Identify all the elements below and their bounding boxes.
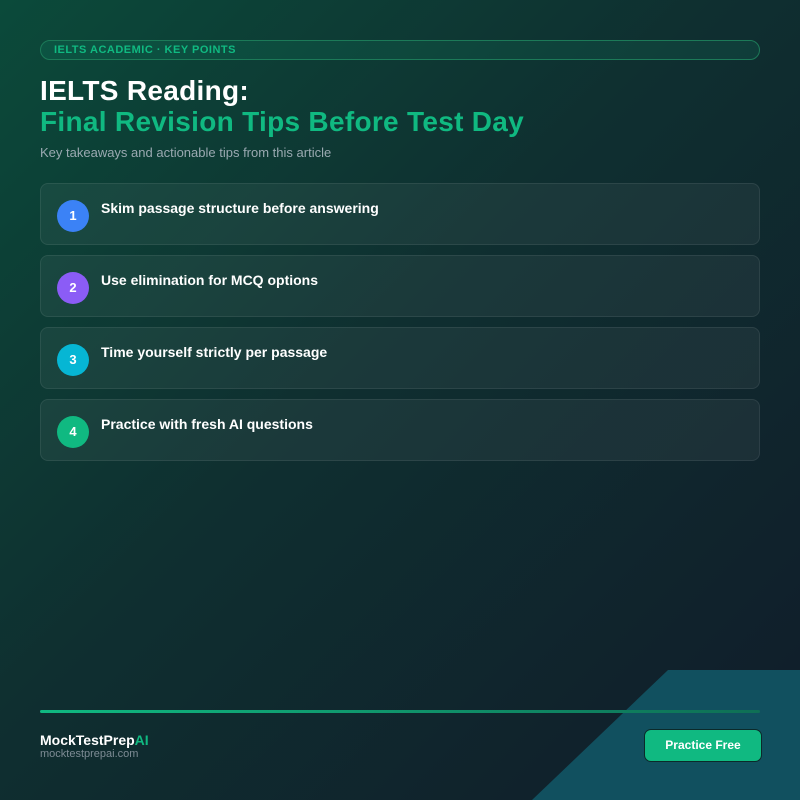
brand: [40, 732, 149, 760]
card 2: Use elimination for MCQ options: [101, 272, 318, 288]
card 3: [40, 327, 760, 389]
card 4: 4: [69, 424, 77, 439]
brand: mocktestprepai.com: [40, 748, 138, 760]
title line 2: Final Revision Tips Before Test Day: [40, 106, 524, 137]
title line 1: IELTS Reading:: [40, 75, 249, 106]
tag pill: [40, 40, 760, 60]
brand: MockTestPrepAI: [40, 732, 149, 748]
card 1: [40, 183, 760, 245]
CTA button: Practice Free: [665, 738, 741, 752]
footer divider: [40, 710, 760, 713]
card 3: 3: [69, 352, 77, 367]
CTA button: [644, 729, 762, 762]
card 3: Time yourself strictly per passage: [101, 344, 327, 360]
card 2: 2: [69, 280, 77, 295]
card 4: Practice with fresh AI questions: [101, 416, 313, 432]
card 1: Skim passage structure before answering: [101, 200, 379, 216]
subtitle: Key takeaways and actionable tips from this article: [40, 145, 331, 160]
card 1: 1: [69, 208, 77, 223]
tag pill: IELTS ACADEMIC · KEY POINTS: [54, 44, 236, 56]
card 4: [40, 399, 760, 461]
card 2: [40, 255, 760, 317]
